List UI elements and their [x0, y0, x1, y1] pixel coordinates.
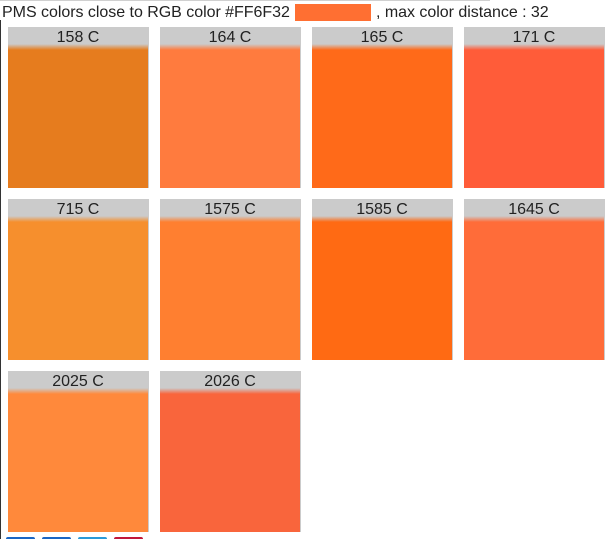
swatch card: 2026 C — [160, 371, 300, 532]
swatch card: 164 C: 164 C — [209, 29, 251, 46]
share buttons row — [6, 537, 143, 539]
swatch card: 1575 C: 1575 C — [204, 201, 256, 218]
swatch card: 1585 C — [312, 199, 452, 360]
swatch card: 158 C: 158 C — [57, 29, 99, 46]
swatch card: 171 C: 171 C — [513, 29, 555, 46]
swatch card: 164 C — [160, 27, 300, 188]
swatch card: 715 C: 715 C — [57, 201, 99, 218]
title: PMS colors close to RGB color #FF6F32 — [2, 4, 290, 21]
swatch card: 715 C — [8, 199, 148, 360]
swatch card: 1575 C — [160, 199, 300, 360]
reference colour swatch — [295, 4, 371, 21]
swatch card: 2025 C: 2025 C — [52, 373, 104, 390]
swatch card: 165 C — [312, 27, 452, 188]
swatch card: 2025 C — [8, 371, 148, 532]
swatch card: 165 C: 165 C — [361, 29, 403, 46]
swatch card: 1645 C: 1645 C — [508, 201, 560, 218]
swatch card: 1645 C — [464, 199, 604, 360]
swatch card: 1585 C: 1585 C — [356, 201, 408, 218]
swatch card: 158 C — [8, 27, 148, 188]
swatch card: 171 C — [464, 27, 604, 188]
title — [2, 4, 549, 21]
title: , max color distance : 32 — [376, 4, 549, 21]
swatch card: 2026 C: 2026 C — [204, 373, 256, 390]
